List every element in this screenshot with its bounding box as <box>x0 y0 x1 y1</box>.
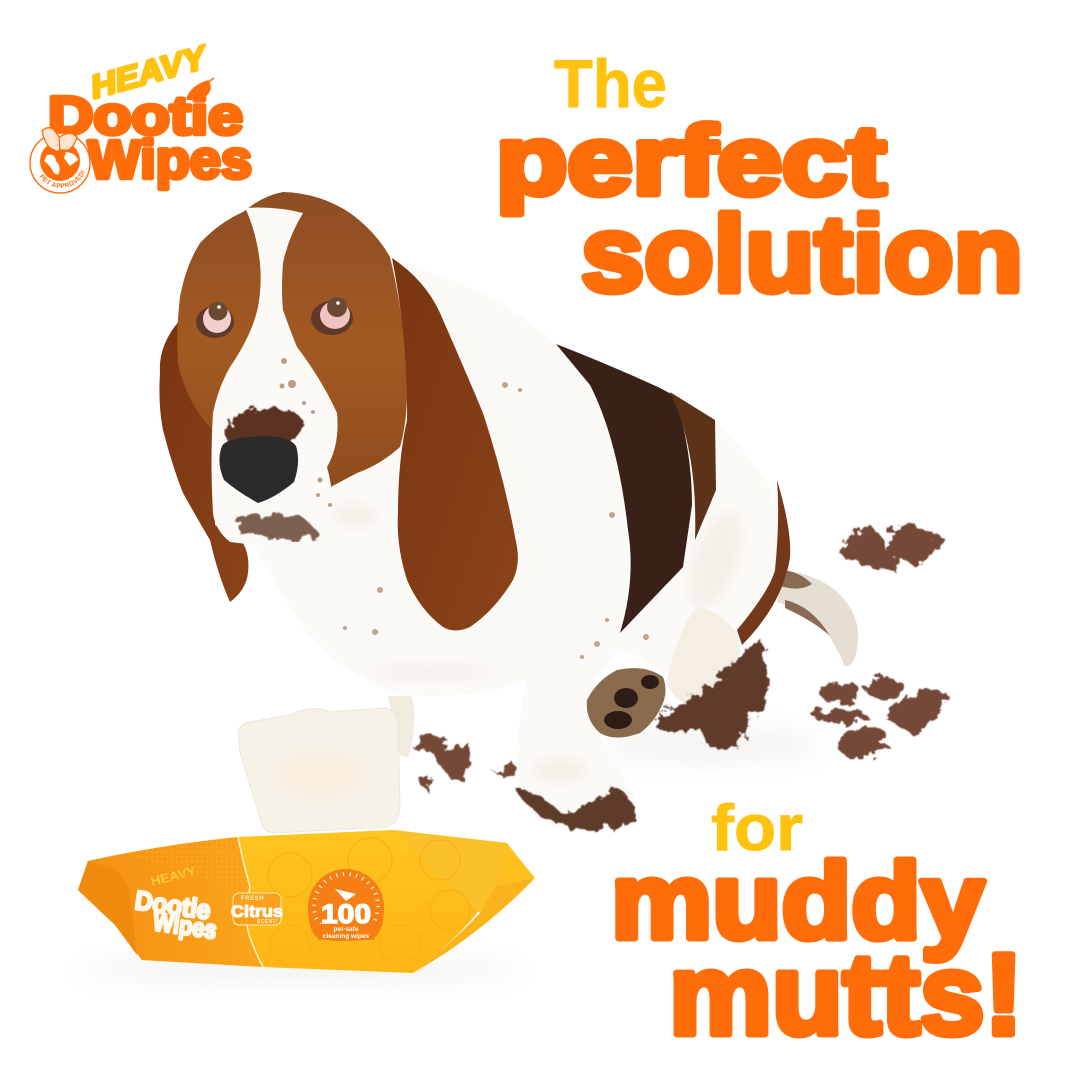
logo word: Dootie: Dootie <box>48 86 243 146</box>
mud splat upper right <box>842 522 945 575</box>
pack citrus badge <box>231 893 283 925</box>
rear leg <box>667 607 740 707</box>
pack logo word: Dootie: Dootie <box>133 885 213 926</box>
small mud prints <box>417 762 518 790</box>
freckles on muzzle <box>280 358 332 507</box>
dog spots <box>343 382 649 659</box>
pack logo <box>133 863 219 945</box>
icon: pet approved globe badge: PET APPROVED! <box>40 170 85 188</box>
back patch highlight <box>670 392 716 540</box>
pack lid <box>238 708 400 833</box>
pack citrus badge: Citrus <box>231 902 283 921</box>
headline: for muddy mutts! <box>611 791 1023 1059</box>
back patch <box>556 344 692 633</box>
dog head <box>177 192 407 500</box>
mud prints by the pack <box>414 736 472 780</box>
mud on front paw <box>514 786 636 828</box>
pack logo word: HEAVY: HEAVY <box>149 863 198 889</box>
fur shading on chest and flank <box>333 503 753 782</box>
pack right fold <box>393 830 507 913</box>
floor shadow beneath dog <box>600 727 820 763</box>
tail brown edge <box>780 570 830 636</box>
pack flap <box>413 878 535 973</box>
dog body <box>250 258 785 832</box>
word: perfect: perfect <box>496 106 886 215</box>
dog left ear <box>159 320 248 602</box>
dog right ear <box>392 258 518 630</box>
right eye <box>311 297 353 335</box>
rear paw <box>587 668 666 738</box>
logo word: Wipes: Wipes <box>88 130 252 190</box>
left eye <box>196 302 234 338</box>
word: for: for <box>711 791 803 864</box>
mud on rear paw <box>656 638 768 749</box>
word: mutts!: mutts! <box>669 931 1023 1059</box>
left fold <box>78 861 137 955</box>
logo word: HEAVY: HEAVY <box>91 38 206 106</box>
dog: muddy basset hound <box>159 192 858 832</box>
product: wipes pack <box>78 708 535 981</box>
dog tail <box>777 570 858 666</box>
pack logo word: Wipes: Wipes <box>151 906 219 945</box>
front leg left stump <box>388 696 414 758</box>
pack citrus badge: FRESH <box>241 896 264 902</box>
pack yellow body <box>78 830 535 973</box>
pack 100 wipes badge: pet-safe <box>334 926 359 933</box>
white blaze and muzzle <box>212 208 338 545</box>
mud splat lower right <box>813 677 948 762</box>
word: solution: solution <box>581 193 1023 314</box>
orange panel divider <box>238 837 263 967</box>
muzzle mud <box>226 406 304 446</box>
citrus pattern <box>268 838 470 965</box>
icon: pet approved globe badge <box>29 127 91 194</box>
pack citrus badge: SCENT! <box>257 919 278 925</box>
pack 100 wipes badge <box>308 869 384 941</box>
word: muddy: muddy <box>611 840 984 961</box>
pack orange panel <box>78 837 263 967</box>
icon: leaf <box>187 78 214 100</box>
pack floor shadow <box>80 959 520 981</box>
logo: Heavy Dootie Wipes <box>29 38 252 194</box>
halftone on orange panel <box>130 837 250 935</box>
word: The: The <box>554 46 667 122</box>
mud prints <box>414 522 948 790</box>
headline: The perfect solution <box>496 46 1023 314</box>
dog haunch marking <box>737 480 790 645</box>
mouth mud <box>234 513 320 538</box>
icon: nose <box>219 436 298 503</box>
pack 100 wipes badge: cleaning wipes <box>323 933 369 940</box>
pack 100 wipes badge: 100 <box>321 899 371 929</box>
